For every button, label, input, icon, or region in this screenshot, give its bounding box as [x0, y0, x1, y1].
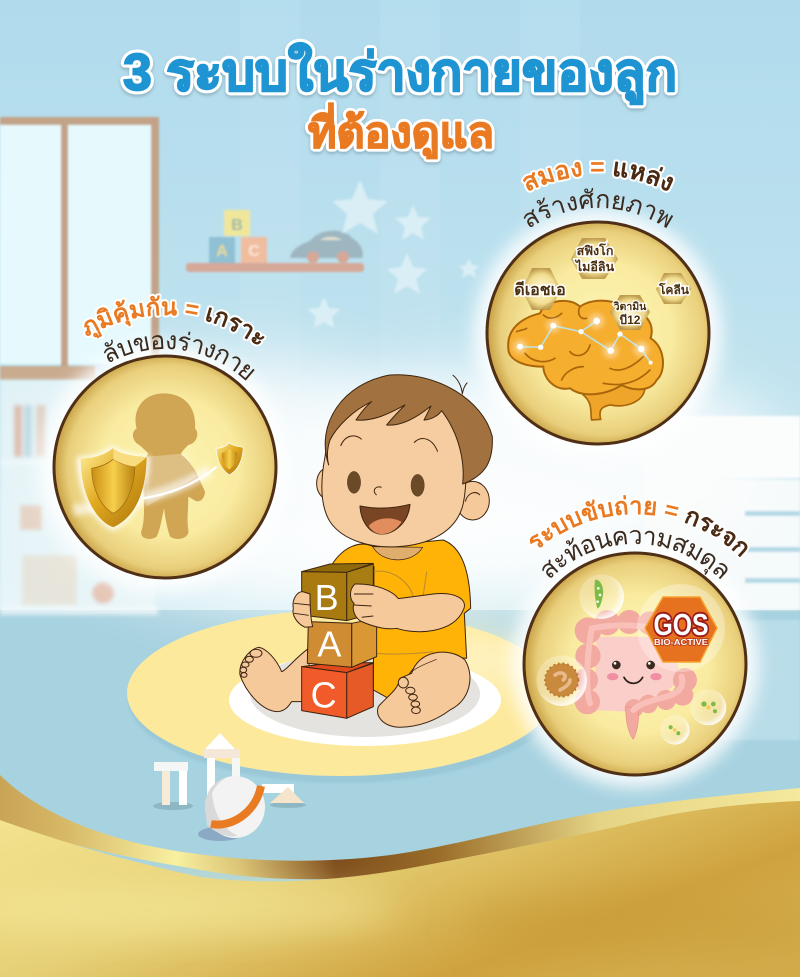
- left leg: [240, 647, 313, 712]
- brows: [341, 436, 438, 452]
- body: [332, 540, 471, 698]
- eyes: [347, 471, 361, 493]
- nose: [374, 487, 382, 495]
- nutrient badge: choline: [656, 273, 691, 304]
- block B: [302, 563, 373, 572]
- baby with blocks: [240, 375, 492, 727]
- baby silhouette and shields: [73, 393, 243, 539]
- block C: [302, 663, 373, 673]
- nutrient badge: vitamin B12: [610, 295, 650, 330]
- heading: immunity: ลับของร่างกาย: [104, 332, 255, 381]
- heading: brain: สร้างศักยภาพ: [524, 188, 674, 228]
- nutrient badge: choline: โคลีน: [658, 282, 690, 297]
- wall shelf with toys: [186, 210, 364, 272]
- title: 3 ระบบในร่างกายของลูก: [123, 42, 677, 105]
- heading: brain: สมอง = แหล่ง: [520, 160, 676, 193]
- mouth: [360, 504, 410, 534]
- window: [0, 117, 159, 380]
- brain illustration: [508, 301, 663, 420]
- nutrient badge: sphingomyelin: สฟิงโก: [577, 243, 613, 258]
- GOS bio-active badge: GOS: [654, 607, 708, 642]
- baby with blocks: C: [311, 674, 337, 715]
- nutrient badge: vitamin B12: บี12: [620, 313, 641, 327]
- nutrient badge: DHA: ดีเอชเอ: [514, 280, 566, 299]
- nutrient badge: sphingomyelin: ไมอีลิน: [574, 259, 615, 274]
- title: 3 ระบบในร่างกายของลูก: [123, 42, 677, 105]
- bookshelf: [0, 380, 158, 615]
- wall shelf with toys: B: [231, 217, 243, 234]
- left ear: [317, 468, 337, 498]
- heading: brain: [520, 160, 676, 228]
- baby with blocks: B: [315, 577, 339, 618]
- right leg: [378, 652, 470, 727]
- heading: immunity: [82, 293, 266, 381]
- baby with blocks: A: [317, 624, 341, 665]
- face: [322, 383, 466, 547]
- toy blocks and ball: [153, 733, 306, 841]
- panel: immunity: [37, 293, 278, 594]
- nutrient badge: sphingomyelin: [571, 238, 618, 279]
- white dressers: [645, 416, 800, 740]
- title: [123, 42, 677, 159]
- GOS bio-active badge: BIO-ACTIVE: [654, 637, 708, 647]
- GOS bio-active badge: [637, 584, 725, 672]
- panel: digestive: [502, 495, 767, 797]
- heading: immunity: ภูมิคุ้มกัน = เกราะ: [82, 293, 266, 346]
- right arm: [350, 584, 464, 632]
- wall shelf with toys: A: [216, 243, 228, 260]
- intestine illustration: [574, 610, 697, 739]
- play mat: [127, 610, 558, 783]
- panel: brain: [466, 160, 730, 446]
- hair: [325, 375, 492, 484]
- gold wave: [0, 775, 800, 977]
- heading: digestive: ระบบขับถ่าย = กระจก: [530, 495, 748, 558]
- heading: immunity: ภูมิคุ้มกัน = เกราะ: [84, 295, 265, 344]
- nutrient badge: DHA: [514, 268, 566, 310]
- nutrient badge: vitamin B12: วิตามิน: [613, 301, 647, 313]
- heading: digestive: สะท้อนความสมดุล: [542, 530, 728, 580]
- bacteria bubbles: [536, 574, 726, 745]
- block A: [352, 618, 377, 667]
- right ear: [456, 481, 489, 520]
- left hand: [293, 592, 313, 627]
- title: ที่ต้องดูแล: [308, 103, 494, 159]
- heading: digestive: ระบบขับถ่าย = กระจก: [731, 541, 750, 559]
- wall stars: [308, 180, 479, 328]
- wall shelf with toys: C: [248, 243, 260, 260]
- heading: brain: สมอง = แหล่ง: [522, 161, 674, 191]
- title: ที่ต้องดูแล: [308, 103, 494, 159]
